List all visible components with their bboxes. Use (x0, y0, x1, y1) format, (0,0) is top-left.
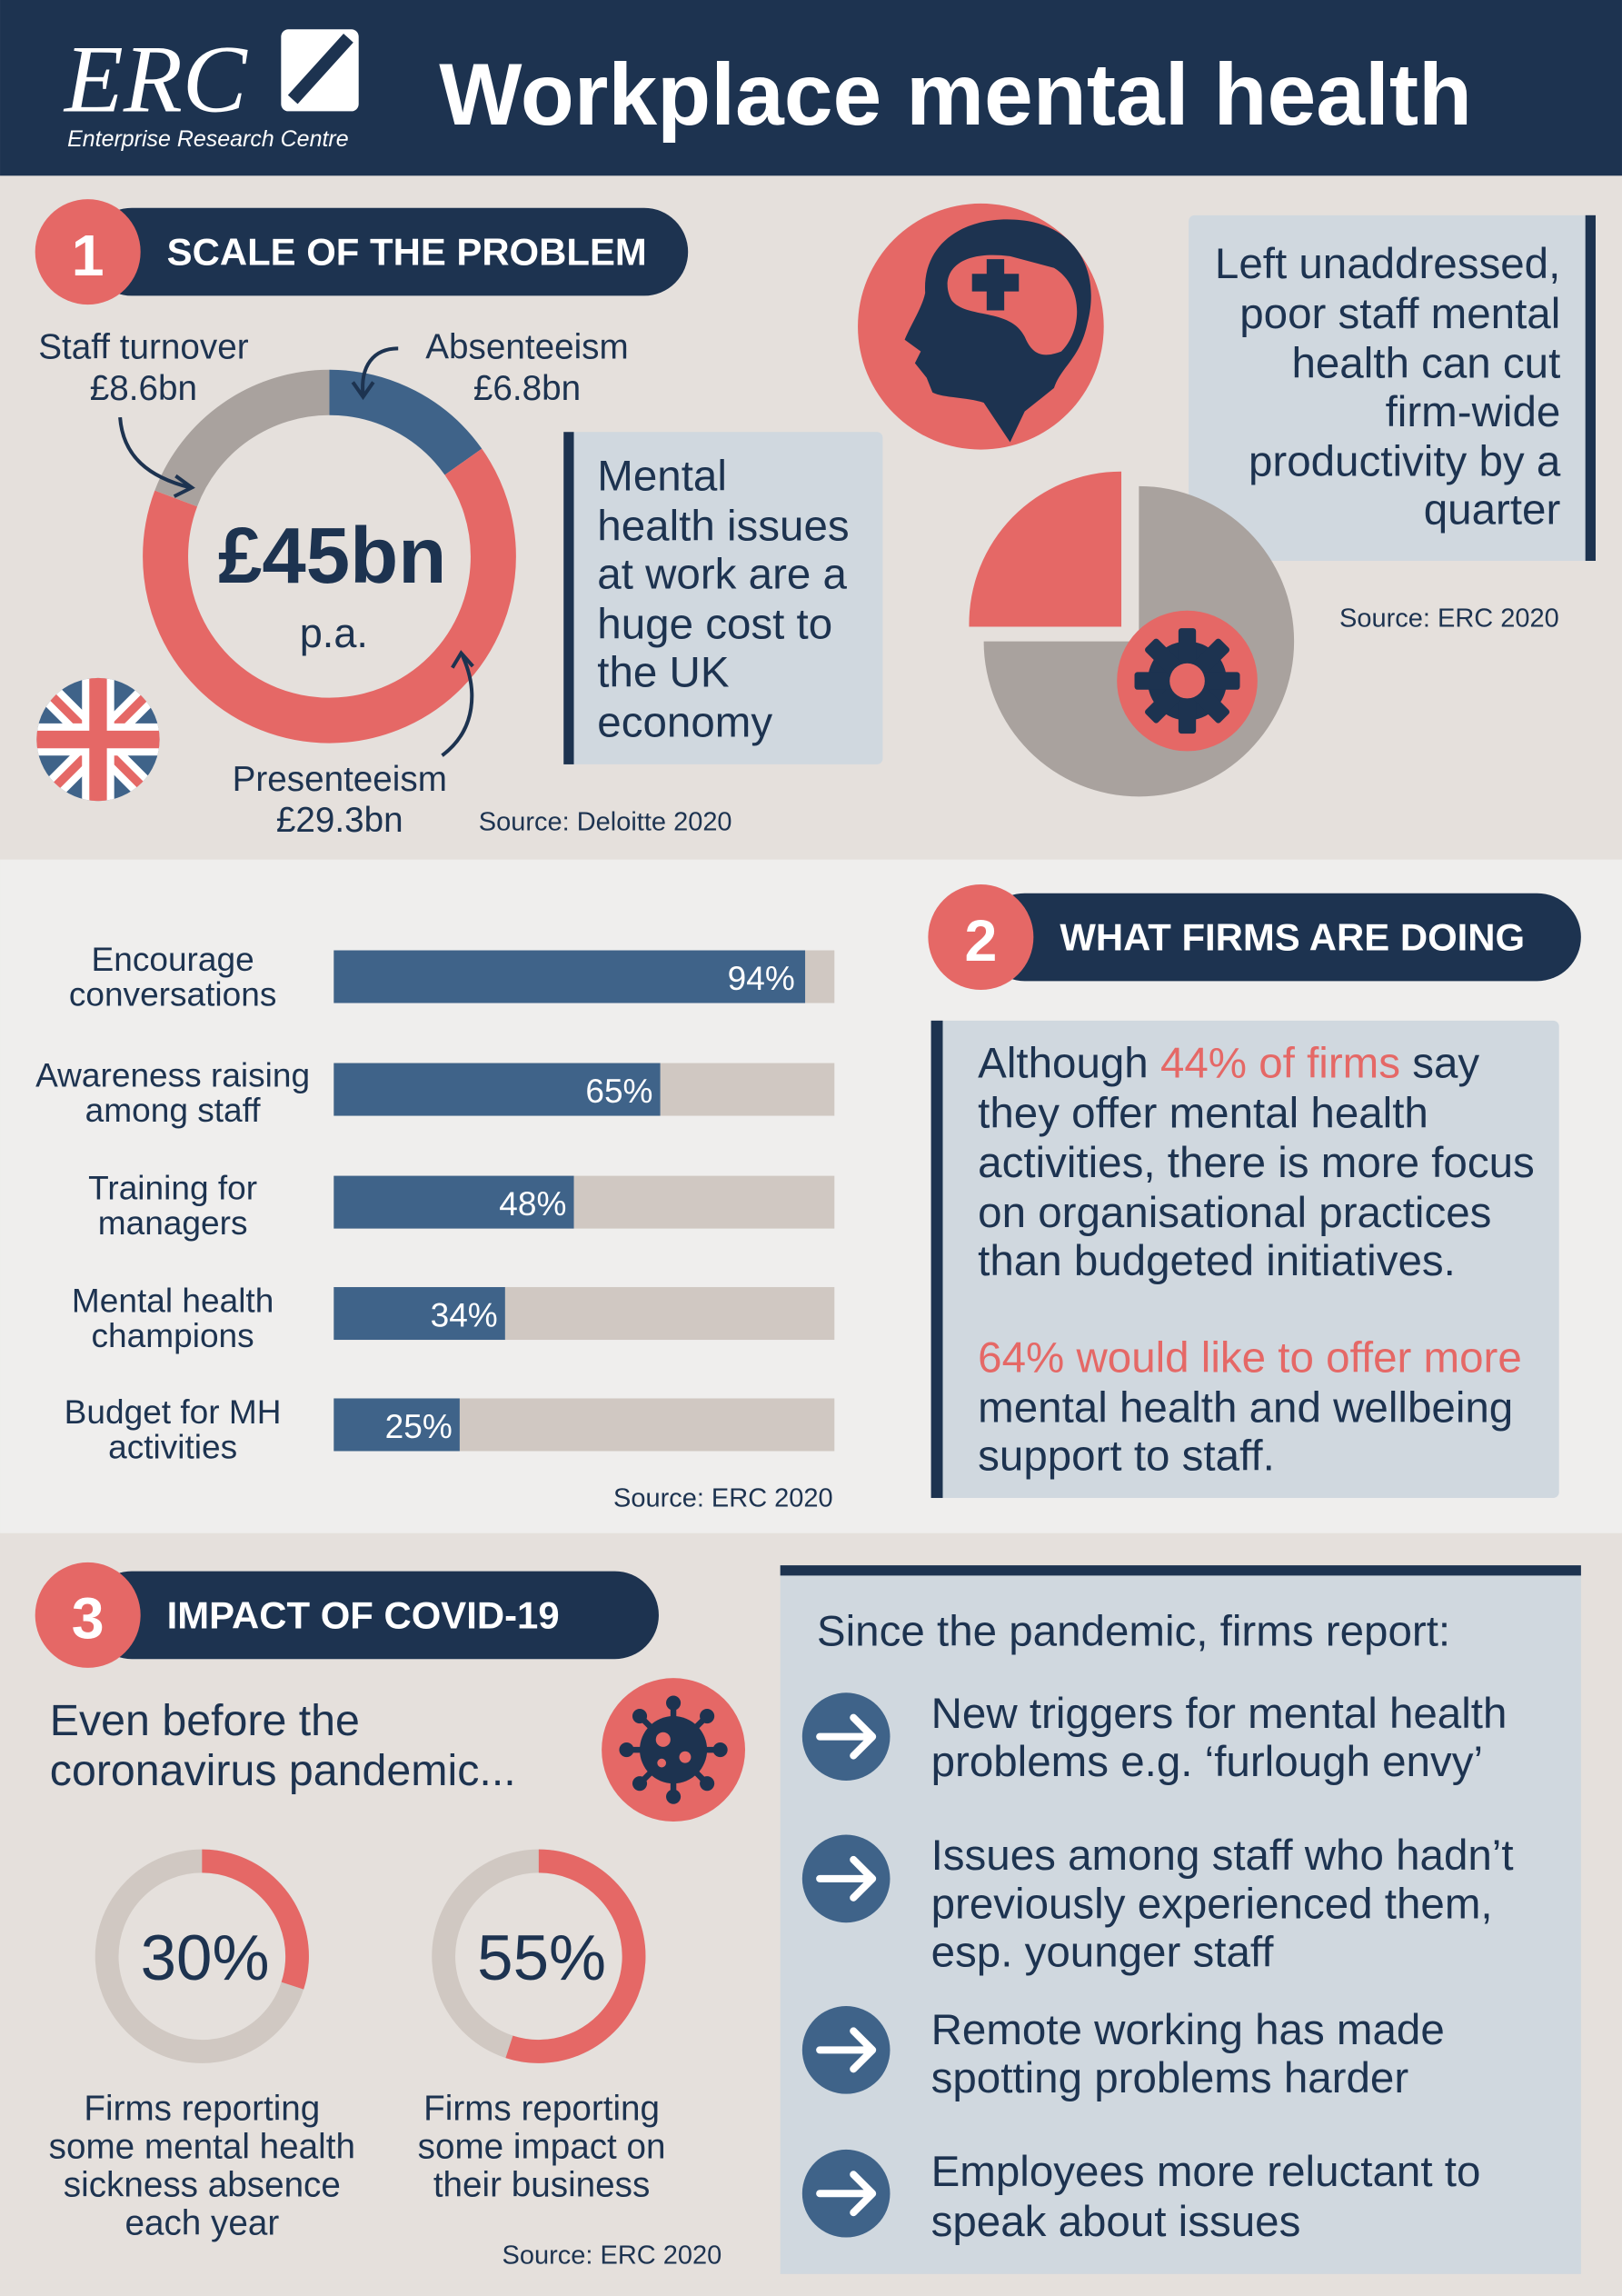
bar chart: 65% (585, 1072, 653, 1110)
bar chart: Awareness raising (35, 1055, 310, 1093)
text box: productivity: poor staff mental (1239, 290, 1560, 338)
bar chart: Budget for MH (65, 1393, 282, 1431)
logo: ERC (63, 25, 248, 132)
bar chart: Mental health (72, 1281, 274, 1319)
text box: what firms doing: Although 44% of firms say (978, 1040, 1479, 1088)
intro text: coronavirus pandemic... (50, 1746, 516, 1795)
panel: since the pandemic (781, 1565, 1581, 2274)
donut: 55%: 55% (477, 1922, 606, 1994)
title: Workplace mental health (439, 46, 1472, 144)
section 3 heading (35, 1562, 659, 1668)
text box: cost to economy: the UK (597, 649, 730, 697)
donut labels: Presenteeism (233, 760, 447, 799)
source erc 2: Source: ERC 2020 (613, 1484, 833, 1513)
text box: productivity: firm-wide (1386, 388, 1560, 436)
donut labels (38, 328, 629, 840)
text box: cost to economy: economy (597, 698, 772, 746)
text box: what firms doing: 64% would like to offer more (978, 1333, 1522, 1382)
icon: head (858, 204, 1104, 450)
bar chart: Training for (88, 1168, 257, 1206)
logo (63, 25, 359, 152)
header (0, 0, 1622, 175)
icon: union jack (36, 678, 160, 802)
source deloitte: Source: Deloitte 2020 (479, 807, 732, 836)
bar chart: conversations (69, 975, 276, 1013)
donut: 55% (418, 1862, 666, 2204)
donut labels: £29.3bn (276, 801, 403, 840)
bar chart: activities (108, 1428, 237, 1466)
donut labels: £6.8bn (473, 369, 581, 408)
panel: since the pandemic: Issues among staff who hadn’t (931, 1832, 1514, 1880)
donut: 30%: some mental health (49, 2128, 355, 2167)
text box: cost to economy: health issues (597, 502, 850, 550)
section 3 heading: 3 (72, 1586, 104, 1652)
text box: productivity: health can cut (1291, 340, 1560, 388)
panel: since the pandemic: Since the pandemic, firms report: (817, 1608, 1450, 1656)
panel: since the pandemic: previously experienced them, (931, 1880, 1493, 1928)
donut: 30%: each year (124, 2203, 279, 2242)
text box: productivity: productivity by a (1249, 438, 1561, 486)
text box: productivity: quarter (1424, 486, 1560, 534)
text box: what firms doing: mental health and wellbeing (978, 1383, 1513, 1432)
text box: what firms doing: activities, there is more focus (978, 1139, 1535, 1187)
pie chart with gear (969, 472, 1294, 796)
logo: Enterprise Research Centre (67, 126, 349, 152)
donut labels: Staff turnover (38, 328, 249, 367)
panel: since the pandemic: speak about issues (931, 2198, 1300, 2246)
bar chart: 94% (728, 959, 795, 997)
donut chart: cost: £45bn (218, 512, 446, 600)
panel: since the pandemic: problems e.g. ‘furlough envy’ (931, 1738, 1483, 1786)
donut: 30%: 30% (141, 1922, 269, 1994)
section 3 heading: IMPACT OF COVID-19 (167, 1593, 560, 1636)
donut: 30%: Firms reporting (84, 2090, 320, 2129)
bar chart (35, 940, 834, 1466)
icon: virus (602, 1678, 745, 1822)
intro text (50, 1696, 516, 1795)
section 1 heading (35, 199, 688, 304)
panel: since the pandemic: Employees more reluctant to (931, 2148, 1480, 2196)
panel: since the pandemic: Remote working has made (931, 2006, 1445, 2054)
source erc 3: Source: ERC 2020 (503, 2241, 721, 2271)
bar chart: among staff (85, 1091, 261, 1129)
bar chart: 34% (431, 1296, 498, 1334)
panel: since the pandemic: esp. younger staff (931, 1929, 1274, 1977)
section 1 heading: SCALE OF THE PROBLEM (167, 231, 647, 274)
section 1 heading: 1 (72, 223, 104, 288)
text box: what firms doing: on organisational practices (978, 1189, 1491, 1237)
source erc 1: Source: ERC 2020 (1339, 604, 1559, 633)
text box: productivity (1189, 215, 1596, 561)
text box: cost to economy (563, 432, 882, 764)
donut: 55%: Firms reporting (423, 2090, 660, 2129)
bar chart: 48% (499, 1184, 566, 1223)
text box: what firms doing (931, 1021, 1559, 1498)
text box: what firms doing: than budgeted initiatives. (978, 1237, 1456, 1285)
panel: since the pandemic: New triggers for mental health (931, 1690, 1507, 1738)
text box: cost to economy: huge cost to (597, 600, 832, 648)
bar chart: champions (92, 1316, 254, 1354)
text box: cost to economy: Mental (597, 453, 727, 501)
intro text: Even before the (50, 1696, 360, 1745)
bar chart: managers (98, 1203, 247, 1242)
text box: productivity: Left unaddressed, (1215, 240, 1560, 288)
donut labels: £8.6bn (90, 369, 197, 408)
text box: cost to economy: at work are a (597, 551, 848, 599)
donut: 55%: their business (433, 2165, 650, 2204)
donut: 30% (49, 1862, 355, 2242)
panel: since the pandemic: spotting problems harder (931, 2054, 1408, 2102)
donut: 30%: sickness absence (64, 2165, 341, 2204)
section 2 heading: WHAT FIRMS ARE DOING (1060, 916, 1525, 959)
donut: 55%: some impact on (418, 2128, 666, 2167)
donut chart: cost: p.a. (300, 610, 368, 656)
section 2 heading (928, 884, 1581, 990)
donut chart: cost (165, 393, 493, 721)
text box: what firms doing: they offer mental health (978, 1089, 1428, 1137)
donut labels: Absenteeism (425, 328, 629, 367)
section 2 heading: 2 (964, 908, 997, 973)
text box: what firms doing: support to staff. (978, 1432, 1275, 1480)
bar chart: 25% (385, 1407, 453, 1445)
bar chart: Encourage (92, 940, 254, 978)
